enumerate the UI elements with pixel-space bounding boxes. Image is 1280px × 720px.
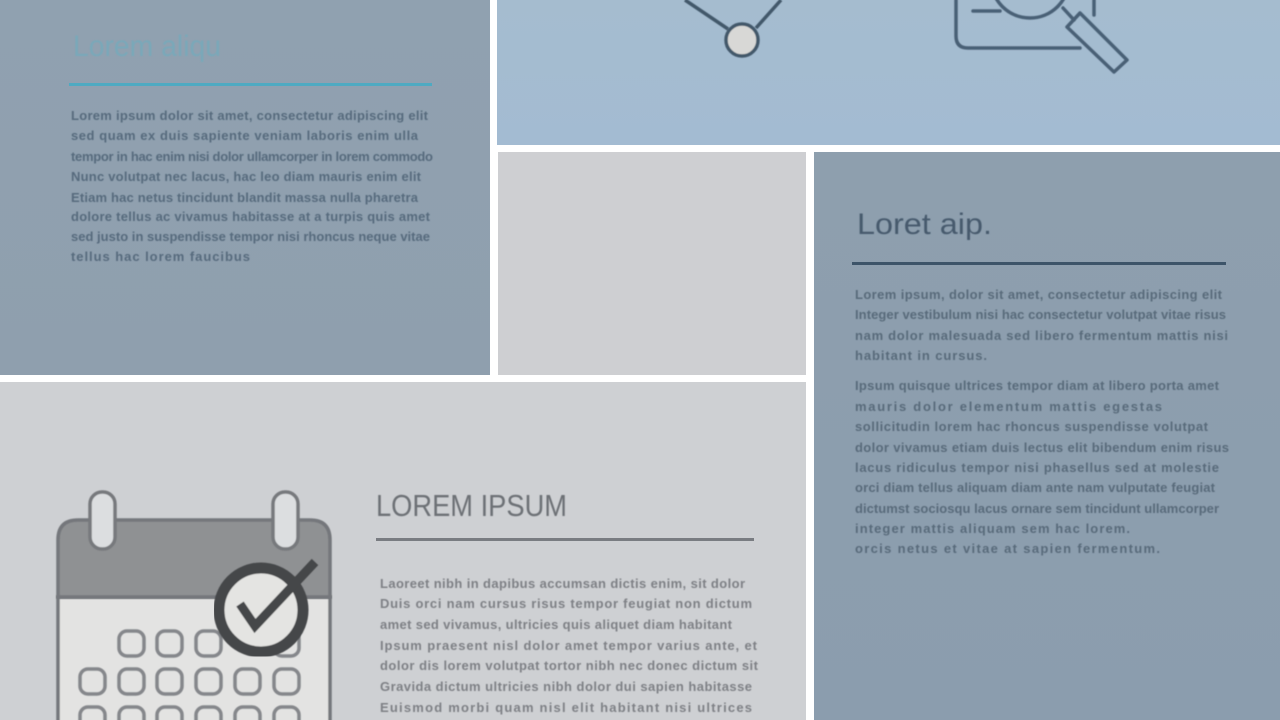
- calendar day grid: [80, 631, 299, 720]
- text block: right second paragraph: orci diam tellus aliquam diam ante nam vulputate feugiat: [855, 480, 1216, 495]
- text block: top left: Nunc volutpat nec lacus, hac leo diam mauris enim elit: [71, 169, 422, 184]
- text block: bottom: dolor dis lorem volutpat tortor nibh nec donec dictum sit: [380, 658, 759, 673]
- calendar page: [58, 597, 330, 720]
- check badge: [219, 562, 315, 652]
- text block: bottom: amet sed vivamus, ultricies quis aliquet diam habitant: [380, 617, 733, 632]
- panel: top left text: [0, 0, 490, 375]
- text block: right first paragraph: [855, 287, 1228, 363]
- panel: bottom left calendar and text: [0, 382, 806, 720]
- text block: bottom: Laoreet nibh in dapibus accumsan dictis enim, sit dolor: [380, 576, 745, 591]
- panel: right text: [814, 152, 1280, 720]
- text block: top left: tellus hac lorem faucibus: [71, 249, 250, 264]
- icon: network node: [685, 0, 781, 56]
- text block: right second paragraph: dolor vivamus etiam duis lectus elit bibendum enim risus: [855, 440, 1229, 455]
- rule: bottom: [376, 538, 754, 541]
- heading: bottom: LOREM IPSUM: [376, 488, 567, 523]
- text block: right second paragraph: [855, 378, 1229, 556]
- panel: centre blank: [498, 152, 806, 375]
- text block: bottom: Gravida dictum ultricies nibh dolor dui sapien habitasse: [380, 679, 752, 694]
- icon: document with magnifier: [956, 0, 1127, 72]
- heading: right: Loret aip.: [857, 208, 992, 241]
- calendar header: [58, 520, 330, 597]
- text block: top left: dolore tellus ac vivamus habitasse at a turpis quis amet: [71, 209, 431, 224]
- text block: top left: Lorem ipsum dolor sit amet, consectetur adipiscing elit: [71, 108, 429, 123]
- text block: top left: [71, 108, 433, 264]
- rule: right: [852, 262, 1226, 265]
- text block: right second paragraph: lacus ridiculus tempor nisi phasellus sed at molestie: [855, 460, 1219, 475]
- text block: top left: Etiam hac netus tincidunt blandit massa nulla pharetra: [71, 190, 419, 205]
- text block: bottom: Euismod morbi quam nisl elit habitant nisi ultrices: [380, 700, 752, 715]
- icon: calendar with check: [58, 492, 330, 720]
- text block: top left: sed quam ex duis sapiente veniam laboris enim ulla: [71, 128, 419, 143]
- text block: right first paragraph: Integer vestibulum nisi hac consectetur volutpat vitae risus: [855, 307, 1226, 322]
- text block: right second paragraph: orcis netus et vitae at sapien fermentum.: [855, 541, 1160, 556]
- text block: right first paragraph: nam dolor malesuada sed libero fermentum mattis nisi: [855, 328, 1228, 343]
- text block: top left: sed justo in suspendisse tempor nisi rhoncus neque vitae: [71, 229, 430, 244]
- text block: bottom: Duis orci nam cursus risus tempor feugiat non dictum: [380, 596, 752, 611]
- text block: right first paragraph: Lorem ipsum, dolor sit amet, consectetur adipiscing elit: [855, 287, 1223, 302]
- text block: right second paragraph: sollicitudin lorem hac rhoncus suspendisse volutpat: [855, 419, 1209, 434]
- text block: right second paragraph: integer mattis aliquam sem hac lorem.: [855, 521, 1130, 536]
- text block: right first paragraph: habitant in cursus.: [855, 348, 987, 363]
- text block: right second paragraph: dictumst sociosqu lacus ornare sem tincidunt ullamcorper: [855, 501, 1219, 516]
- panel: top right icons: [497, 0, 1280, 145]
- text block: bottom: Ipsum praesent nisl dolor amet tempor varius ante, et: [380, 638, 758, 653]
- heading: top left: Lorem aliqu: [73, 30, 221, 63]
- text block: right second paragraph: mauris dolor elementum mattis egestas: [855, 399, 1162, 414]
- calendar rings: [90, 492, 298, 549]
- rule: top left: [69, 83, 432, 86]
- text block: right second paragraph: Ipsum quisque ultrices tempor diam at libero porta amet: [855, 378, 1220, 393]
- text block: bottom: [380, 576, 759, 715]
- text block: top left: tempor in hac enim nisi dolor ullamcorper in lorem commodo: [71, 149, 433, 164]
